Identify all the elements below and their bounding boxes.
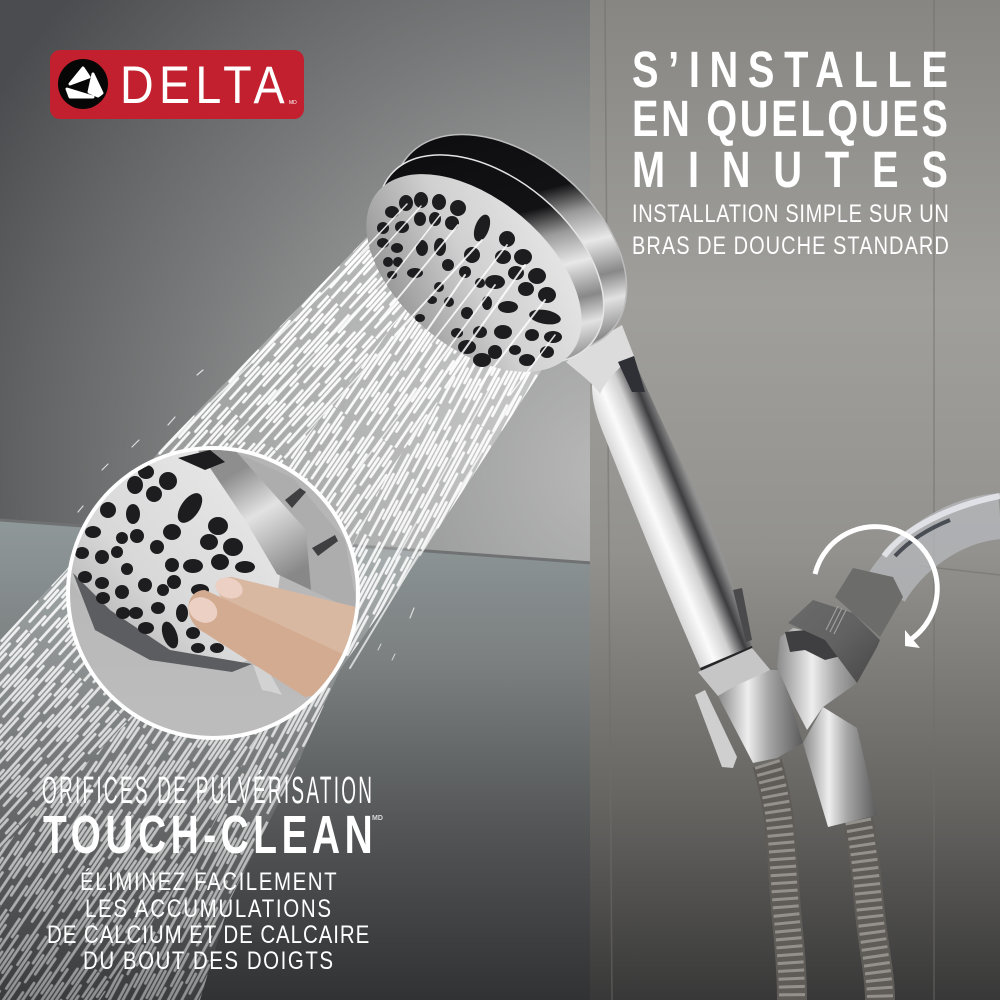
inset face — [70, 451, 280, 662]
grey nut upper — [835, 568, 903, 637]
logo emblem — [58, 59, 108, 109]
water jets over face — [340, 204, 555, 395]
head back rim — [352, 91, 668, 395]
head face — [330, 135, 618, 411]
touch-clean description — [47, 867, 369, 974]
head mid rim — [339, 114, 643, 404]
holder collar and body — [698, 648, 803, 763]
headline: installs in minutes: S’INSTALLE — [632, 41, 948, 98]
hand shower handle — [566, 325, 754, 678]
headline: installs in minutes: EN QUELQUES — [632, 90, 948, 147]
water spray — [0, 232, 545, 1000]
touch-clean description: ÉLIMINEZ FACILEMENT — [80, 867, 337, 895]
inset reflections — [285, 488, 338, 556]
Delta logo — [50, 50, 304, 119]
headline: installs in minutes — [632, 41, 948, 198]
finger: middle — [218, 577, 356, 658]
inset circle: fingers cleaning nozzles — [66, 446, 360, 740]
touch-clean heading: MD — [372, 815, 383, 822]
background: left wall — [0, 0, 592, 1000]
touch-clean description: DE CALCIUM ET DE CALCAIRE — [47, 920, 369, 948]
logo MD mark: MD — [289, 100, 297, 106]
inset face underside — [73, 573, 252, 672]
shower head — [330, 91, 668, 411]
inset dark top — [178, 450, 225, 470]
inset head outer side — [225, 448, 358, 612]
touch-clean heading: TOUCH-CLEAN — [43, 804, 373, 864]
shower arm — [885, 516, 1000, 590]
fingernails — [188, 578, 243, 623]
handle neck shadow — [618, 356, 645, 392]
holder lower tube — [803, 707, 877, 827]
inset handle tip — [253, 665, 282, 695]
flexible hose right — [858, 820, 880, 1000]
spray holes — [377, 192, 562, 367]
touch-clean heading: ORIFICES DE PULVÉRISATION — [42, 770, 372, 812]
clip plate — [695, 690, 737, 768]
dark joint socket — [785, 628, 845, 660]
touch-clean description: LES ACCUMULATIONS — [85, 894, 331, 922]
subheading: install details: INSTALLATION SIMPLE SUR UN — [632, 200, 949, 228]
grey collar nut — [788, 600, 880, 683]
headline: installs in minutes: MINUTES — [632, 141, 948, 198]
touch-clean heading — [42, 770, 383, 864]
rotation arrow — [815, 527, 937, 648]
inset chrome band — [198, 448, 311, 590]
finger: index — [188, 590, 345, 697]
handle neck — [566, 325, 634, 394]
touch-clean description: DU BOUT DES DOIGTS — [83, 946, 333, 974]
inset holes — [75, 465, 255, 653]
arm highlight and reflection — [884, 496, 1000, 556]
handle button — [733, 588, 752, 642]
flexible hose left — [767, 763, 792, 1000]
logo wordmark: DELTA — [120, 55, 285, 115]
subheading: install details: BRAS DE DOUCHE STANDARD — [632, 232, 949, 260]
subheading: install details — [632, 200, 949, 260]
ball joint — [777, 628, 877, 730]
handle ring — [700, 646, 754, 678]
background: right tiled wall — [590, 0, 1000, 1000]
